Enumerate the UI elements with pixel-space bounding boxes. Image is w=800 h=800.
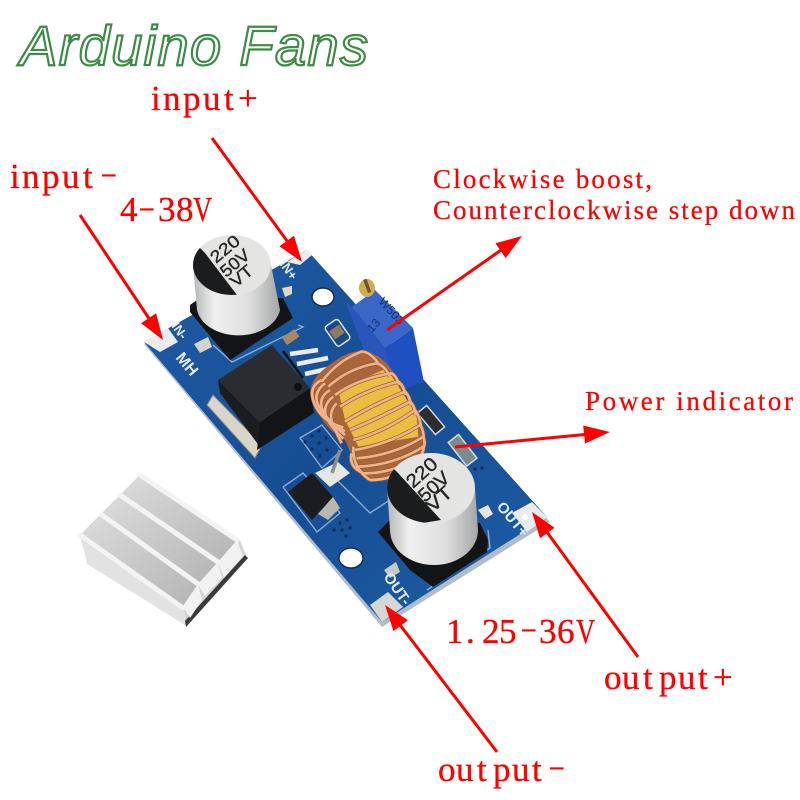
circuit board: IN+ xyxy=(277,257,301,283)
potentiometer: 13 xyxy=(364,315,383,335)
potentiometer xyxy=(345,279,424,392)
heatsink xyxy=(80,475,248,627)
capacitor: input 220uF 50V xyxy=(188,231,293,360)
arrow: power indicator xyxy=(455,426,610,447)
circuit board xyxy=(144,250,550,627)
label: input-: input xyxy=(10,157,93,196)
label: output+: output+ xyxy=(604,658,733,697)
coil lead pad xyxy=(315,450,350,487)
label: output voltage: - xyxy=(520,613,537,644)
solder pads xyxy=(144,328,178,352)
label: output-: output xyxy=(438,750,542,789)
label: input-: - xyxy=(100,158,117,189)
label: potentiometer direction: Counterclockwise step down xyxy=(433,195,796,225)
potentiometer: W503 xyxy=(376,295,407,328)
label: input+: input+ xyxy=(151,79,258,118)
arrow: output+ xyxy=(532,512,638,657)
trace outlines xyxy=(213,325,490,590)
capacitor: output 220uF 50V: 220 xyxy=(402,454,442,493)
label: potentiometer direction xyxy=(433,164,796,225)
label: output voltage: 1.25 xyxy=(446,612,516,651)
arrow: output- xyxy=(385,605,497,752)
label: output-: - xyxy=(548,751,565,782)
label: output voltage: 36 xyxy=(539,612,574,651)
label: input voltage: 38 xyxy=(158,190,194,229)
label: potentiometer direction: Clockwise boost, xyxy=(433,164,652,194)
capacitor: input 220uF 50V: 50V xyxy=(216,245,254,281)
label: output voltage: V xyxy=(576,611,596,651)
label: input voltage xyxy=(120,189,213,229)
label: input voltage: - xyxy=(138,192,155,223)
mounting holes xyxy=(312,288,334,306)
label: input voltage: 4 xyxy=(120,190,138,229)
capacitor: input 220uF 50V: VT xyxy=(226,261,257,291)
circuit board: OUT- xyxy=(380,570,414,609)
title: Arduino Fans: Arduino Fans xyxy=(17,14,368,77)
inductor coil xyxy=(311,351,424,481)
small SMD parts xyxy=(282,318,477,466)
diode xyxy=(288,473,340,520)
capacitor: input 220uF 50V: 220 xyxy=(206,231,244,267)
capacitor: output 220uF 50V: 50V xyxy=(414,467,455,507)
silk labels: IN- xyxy=(169,319,191,342)
label: input voltage: V xyxy=(193,189,213,229)
capacitor: output 220uF 50V: VT xyxy=(422,482,457,517)
arrow: input+ xyxy=(212,138,302,262)
arrow: input- xyxy=(80,215,163,340)
label: power indicator: Power indicator xyxy=(585,386,793,416)
arrow: potentiometer xyxy=(387,236,522,330)
regulator IC xyxy=(207,345,332,458)
circuit board: MH xyxy=(172,350,201,380)
label: output voltage xyxy=(446,611,596,651)
vias xyxy=(303,429,484,538)
capacitor: output 220uF 50V xyxy=(378,453,488,587)
circuit board: OUT+ xyxy=(493,499,532,541)
